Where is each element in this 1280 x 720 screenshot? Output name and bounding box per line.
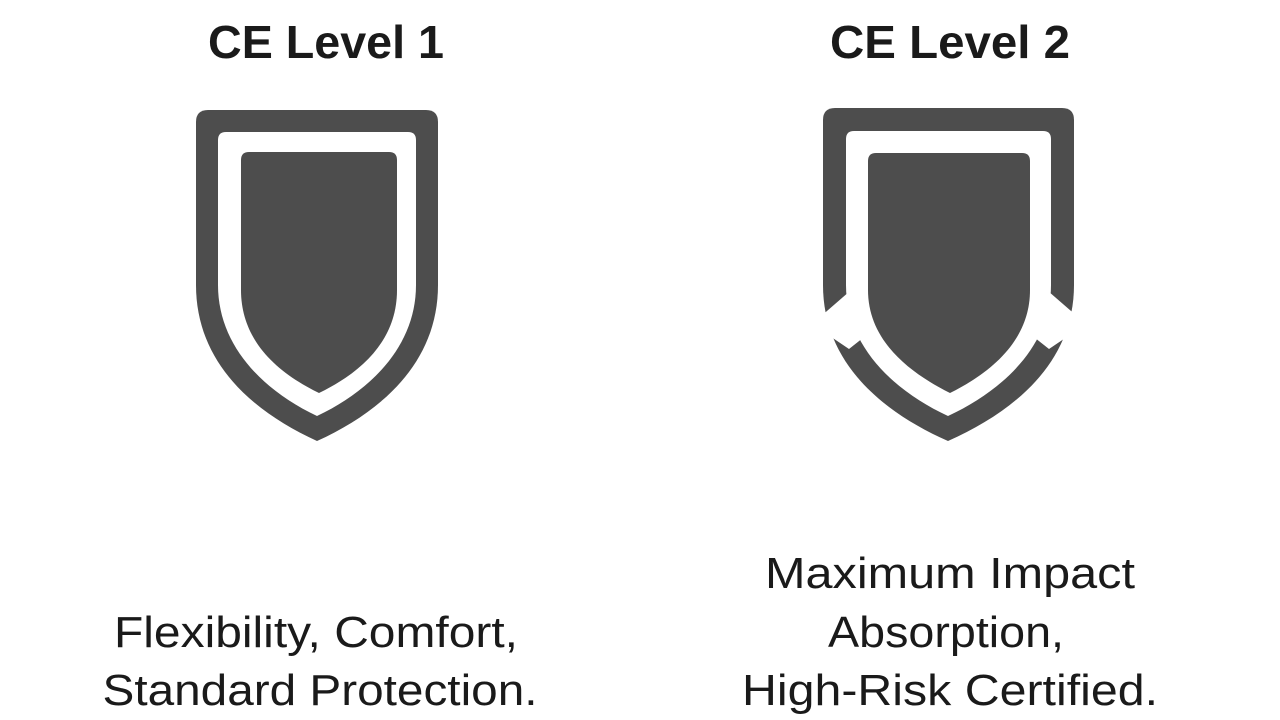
- text: level 1 description: Standard Protection.: [102, 666, 538, 715]
- title: CE Level 2: CE Level 2: [830, 16, 1070, 68]
- text: level 1 description: [102, 608, 538, 715]
- icon: shield level 1: [196, 110, 438, 441]
- text: level 1 description: Flexibility, Comfort,: [114, 608, 518, 657]
- icon: shield level 2: [812, 108, 1086, 441]
- text: level 2 description: Maximum Impact: [765, 549, 1135, 598]
- text: level 2 description: Absorption,: [828, 608, 1064, 657]
- text: level 2 description: [742, 549, 1158, 715]
- text: level 2 description: High-Risk Certified.: [742, 666, 1158, 715]
- title: CE Level 1: CE Level 1: [208, 16, 444, 68]
